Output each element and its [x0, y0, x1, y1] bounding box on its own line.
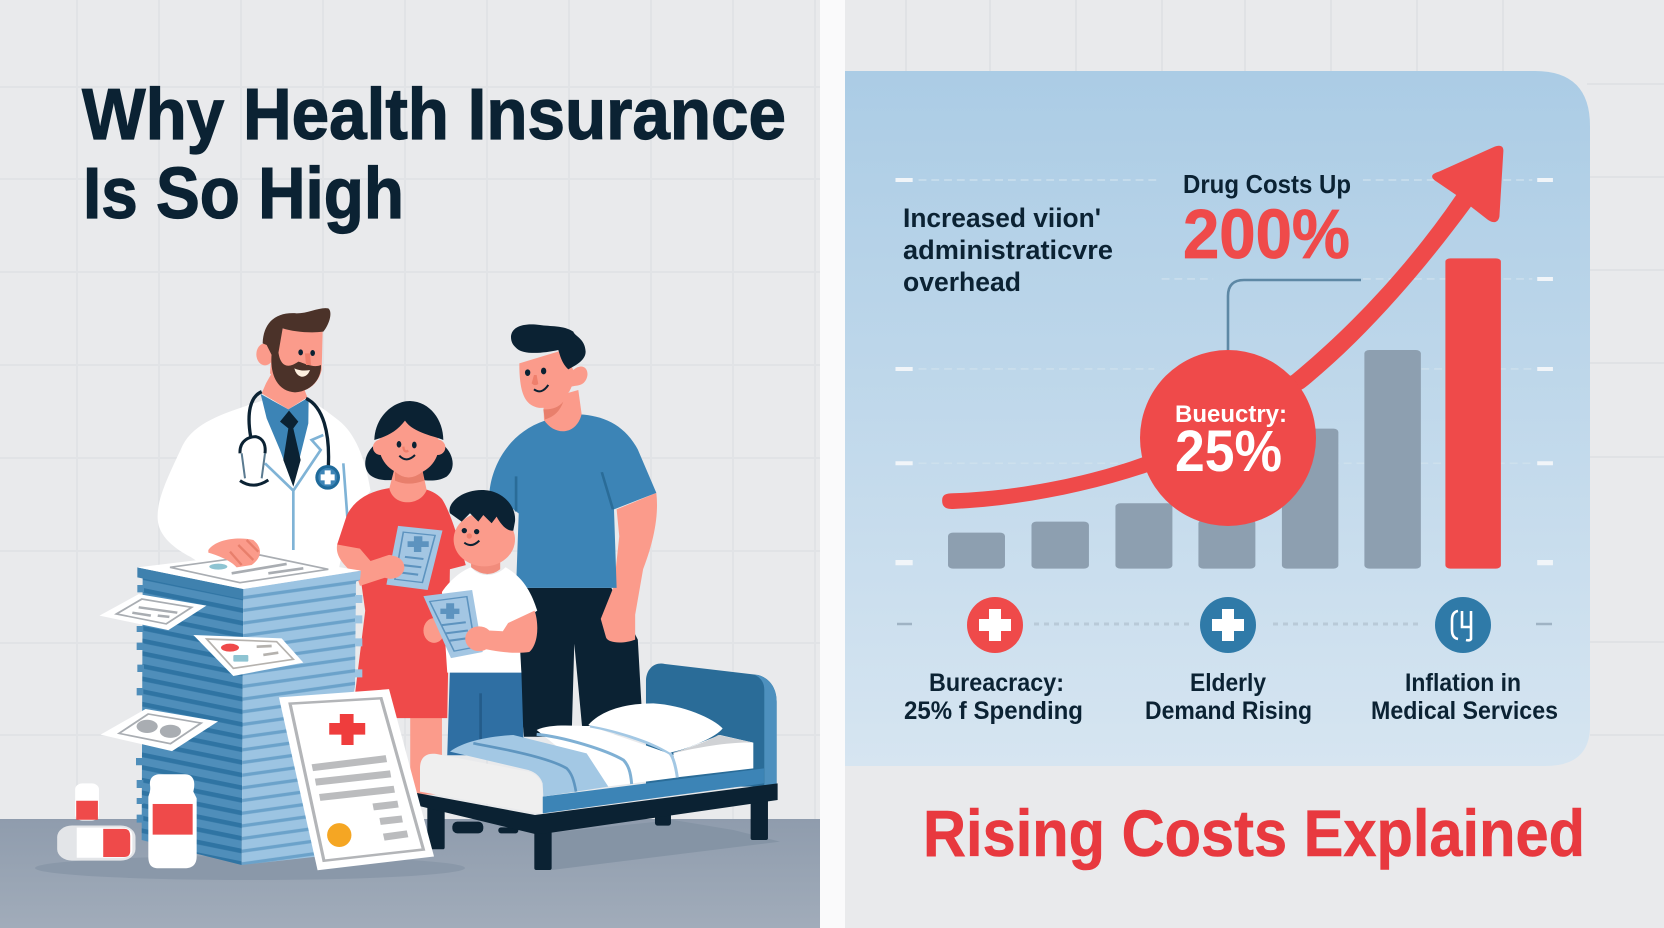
- callout connector: [1228, 280, 1361, 350]
- insurance certificate: [279, 689, 434, 870]
- label: medical inflation: [1371, 669, 1558, 725]
- loose paper 1: [100, 594, 206, 630]
- icon row connectors: [1034, 622, 1423, 626]
- text: administrative overhead: overhead: [903, 267, 1021, 297]
- card held by mother: [386, 526, 442, 590]
- label: elderly demand: Demand Rising: [1145, 697, 1312, 725]
- text: administrative overhead: [903, 203, 1113, 297]
- card held by son: [423, 590, 483, 658]
- label: medical inflation: Medical Services: [1371, 697, 1558, 725]
- label: elderly demand: [1145, 669, 1312, 725]
- callout: drug costs: Drug Costs Up: [1183, 169, 1351, 199]
- label: elderly demand: Elderly: [1190, 669, 1266, 697]
- label: medical inflation: Inflation in: [1405, 669, 1521, 697]
- icon: bureaucracy cross: [967, 597, 1023, 653]
- medicine: small vial: [75, 783, 99, 821]
- title: Is So High: [83, 154, 404, 234]
- title: [82, 75, 786, 234]
- callout: bureaucracy 25%: [1140, 350, 1316, 526]
- hand on paperwork: [208, 538, 260, 567]
- figure: son: [423, 490, 537, 755]
- panel: left background: [0, 0, 820, 928]
- figure: mother: [337, 401, 466, 795]
- top sheet: [137, 553, 361, 589]
- floor shadow: [35, 856, 465, 880]
- title: Why Health Insurance: [82, 75, 786, 155]
- panel: right background grid: [845, 0, 1664, 928]
- hospital bed: [415, 664, 780, 870]
- heading: rising costs explained: Rising Costs Explained: [923, 796, 1585, 870]
- loose paper 3: [101, 709, 218, 751]
- loose paper: summary: [193, 635, 303, 676]
- medicine: bottle: [148, 774, 197, 868]
- text: administrative overhead: administraticvre: [903, 235, 1113, 265]
- stethoscope: [240, 392, 329, 485]
- bar chart: [948, 258, 1501, 569]
- text: administrative overhead: Increased viion': [903, 203, 1101, 233]
- icon: medical inflation: [1435, 597, 1491, 653]
- label: bureaucracy: 25% f Spending: [904, 697, 1083, 725]
- paper stack: [136, 538, 362, 865]
- callout: drug costs: 200%: [1183, 195, 1350, 273]
- figure: father: [490, 324, 657, 737]
- callout: bureaucracy 25%: 25%: [1175, 419, 1282, 484]
- rising arrow: [942, 146, 1503, 509]
- label: bureaucracy: Bureacracy:: [929, 669, 1064, 697]
- figure: doctor: [158, 308, 371, 569]
- icon: elderly cross: [1200, 597, 1256, 653]
- medicine: capsule: [57, 826, 136, 861]
- chart gridlines: [895, 178, 1553, 565]
- label: bureaucracy: [904, 669, 1083, 725]
- illustration: doctor, family, paperwork and bed: [35, 308, 780, 880]
- panel: right chart: [845, 71, 1590, 766]
- callout: bureaucracy 25%: Bueuctry:: [1175, 401, 1287, 428]
